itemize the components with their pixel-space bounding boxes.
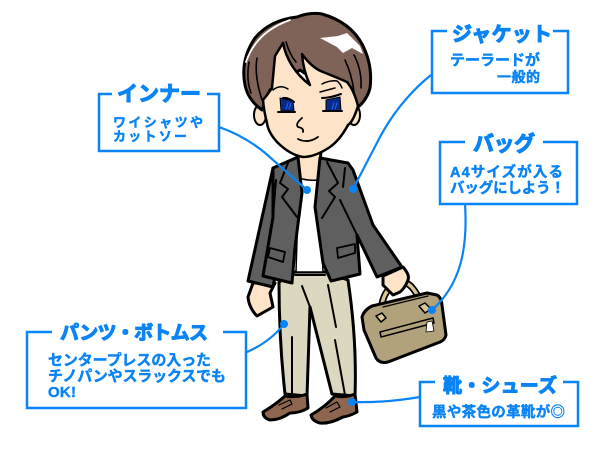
callout: 靴・シューズ: 黒や茶色の革靴が◎ xyxy=(432,403,565,421)
heading: 靴・シューズ xyxy=(443,374,557,397)
callout: バッグ xyxy=(428,132,577,314)
callout: パンツ・ボトムス xyxy=(27,320,288,408)
callout: 靴・シューズ xyxy=(348,374,578,426)
shoes xyxy=(263,394,357,423)
callout: バッグ: A4サイズが入る xyxy=(450,163,563,181)
callout: パンツ・ボトムス: OK! xyxy=(48,384,76,401)
callout: バッグ: バッグにしよう！ xyxy=(450,179,565,197)
jacket xyxy=(248,157,402,287)
callout: ジャケット: 一般的 xyxy=(497,69,540,85)
callout: ジャケット xyxy=(349,23,568,193)
heading: パンツ・ボトムス xyxy=(60,322,208,344)
callout: ジャケット: テーラードが xyxy=(450,51,540,69)
bag xyxy=(362,284,446,362)
shirt and neck xyxy=(296,150,323,272)
head xyxy=(244,13,371,157)
heading: インナー xyxy=(117,83,201,106)
right hand xyxy=(383,267,408,295)
left hand xyxy=(248,283,275,316)
heading: バッグ xyxy=(473,132,535,156)
callout: インナー: カットソー xyxy=(113,129,187,144)
face: eyes, brows, nose, mouth xyxy=(273,81,342,141)
pants xyxy=(279,272,355,396)
callout: インナー xyxy=(99,83,311,194)
person illustration xyxy=(244,13,446,423)
callout: パンツ・ボトムス: チノパンやスラックスでも xyxy=(48,368,226,385)
callout: インナー: ワイシャツや xyxy=(113,115,203,130)
callout: パンツ・ボトムス: センタープレスの入った xyxy=(48,352,211,369)
heading: ジャケット xyxy=(452,23,552,46)
